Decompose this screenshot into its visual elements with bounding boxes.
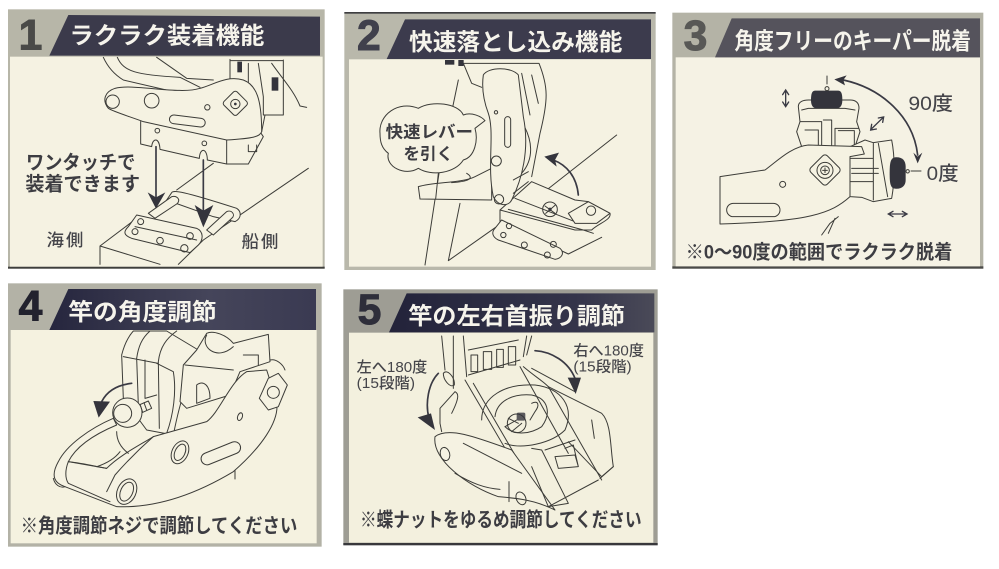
illustration: wing nut and swivel base [435,336,613,510]
callout: pull quick lever: を引く [403,144,453,163]
illustration: angle adjust knob and arm [53,331,287,508]
arrow: right mounting [195,160,213,227]
label: 0 degrees: 0度 [927,163,959,185]
heading 5 [358,286,654,334]
heading 1: 1 [19,11,42,59]
callout: pull quick lever: 快速レバー [386,122,473,141]
arrow: left rotation [418,373,438,430]
note: use angle screw: ※角度調節ネジで調節してください [21,513,297,537]
callout: pull quick lever [380,104,485,173]
label: sea side: 海側 [47,230,83,250]
label: left 180 degrees: 左へ180度 [357,359,428,376]
heading 2: 2 [357,12,381,60]
heading 4: 竿の角度調節 [68,299,217,325]
label: right 180 degrees: 右へ180度 [573,342,644,359]
label: right 180 degrees: (15段階) [573,358,632,375]
arrow: left mounting [148,147,165,209]
heading 1: ラクラク装着機能 [69,22,264,48]
note: 0 to 90 degree range: ※0～90度の範囲でラクラク脱着 [686,242,952,264]
arrow: diagonal adjust [871,117,884,130]
illustration: keeper at 0 and 90 degrees [720,76,921,235]
panel 2: quick drop-in [344,12,656,270]
arrow: horizontal adjust [888,211,907,217]
heading 2 [357,12,651,60]
heading 4 [19,282,316,330]
label: left 180 degrees: (15段階) [357,375,415,392]
illustration: quick lever and base [418,60,617,265]
heading 3 [684,12,980,60]
heading 4: 4 [19,282,43,330]
panel 3: angle-free keeper [672,12,983,269]
label: left 180 degrees [357,359,428,392]
illustration: mount above deck rail [100,57,308,264]
arrow: lever direction [544,153,578,195]
panel 5: left-right swivel adjustment [343,286,658,545]
text: one-touch mounting: 装着できます [25,174,140,196]
arrow: 90 degree arc [834,75,922,163]
note: loosen wing nut: ※蝶ナットをゆるめ調節してください [360,509,642,532]
text: one-touch mounting: ワンタッチで [26,152,135,174]
arrow: right rotation [535,351,581,394]
arrow: knob rotation [93,383,132,418]
text: one-touch mounting [25,152,140,196]
panel 1: easy mounting [8,9,325,269]
heading 1 [19,11,320,59]
label: 90 degrees: 90度 [908,93,953,115]
heading 3: 3 [684,12,707,60]
heading 5: 5 [358,286,381,334]
heading 5: 竿の左右首振り調節 [408,303,625,329]
arrow: vertical adjust [783,90,789,107]
heading 2: 快速落とし込み機能 [409,29,622,55]
label: right 180 degrees [573,342,644,375]
panel 4: rod angle adjustment [8,282,322,547]
label: boat side: 船側 [242,231,278,251]
